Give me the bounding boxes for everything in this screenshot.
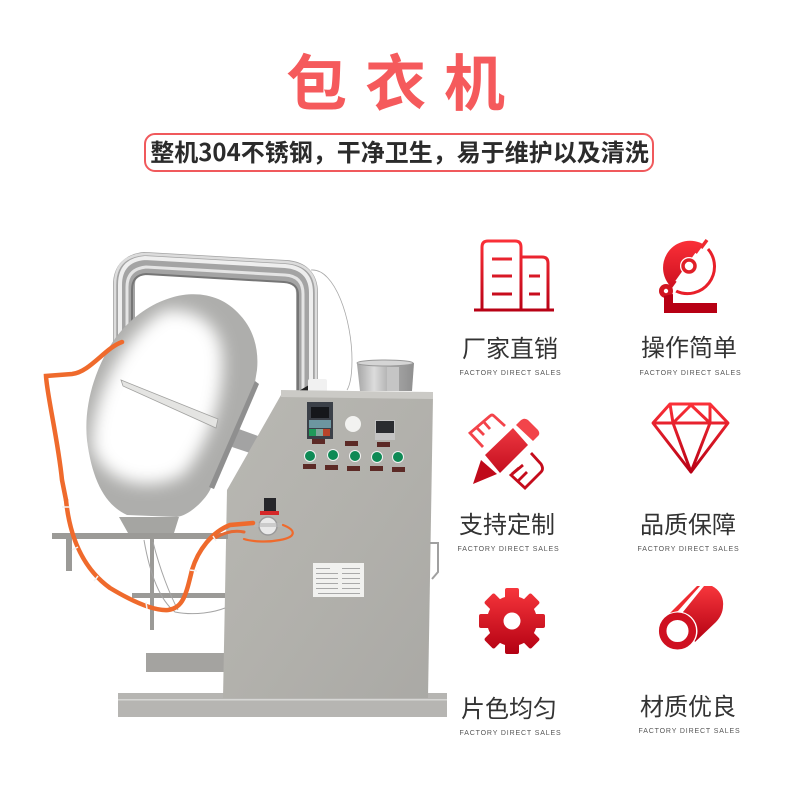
hub between drum and cabinet bbox=[232, 428, 258, 453]
coating drum bbox=[86, 294, 259, 517]
overhead steel pipe bbox=[115, 254, 316, 392]
control panel bbox=[303, 402, 405, 472]
feature: factory direct sales bbox=[459, 241, 562, 377]
feature: easy operation bbox=[639, 240, 742, 377]
thin grey wires bbox=[144, 540, 225, 614]
green buttons bbox=[304, 450, 404, 462]
thin sensor wire bbox=[311, 270, 352, 390]
label: 操作简单 bbox=[641, 335, 737, 362]
subtitle pill: 整机304不锈钢，干净卫生，易于维护以及清洗 bbox=[150, 133, 649, 168]
english caption: FACTORY DIRECT SALES bbox=[639, 370, 742, 377]
small red-brown tags bbox=[303, 439, 405, 472]
orange air hoses bbox=[46, 342, 293, 610]
rear rails bbox=[146, 653, 226, 672]
english caption: FACTORY DIRECT SALES bbox=[457, 546, 560, 553]
label: 支持定制 bbox=[459, 512, 555, 539]
drum glass slot bbox=[121, 380, 218, 428]
label: 材质优良 bbox=[640, 694, 736, 721]
side handle bbox=[430, 543, 438, 579]
icon: gear bbox=[479, 588, 545, 654]
temperature controller bbox=[375, 420, 395, 440]
feature: fine material bbox=[638, 586, 741, 735]
support rods bbox=[52, 533, 228, 630]
machine photo illustration bbox=[46, 254, 447, 717]
feature: quality assurance bbox=[637, 404, 740, 553]
funnel under drum bbox=[119, 517, 179, 533]
cabinet body bbox=[223, 395, 433, 698]
feature: custom support bbox=[457, 415, 560, 553]
frequency inverter bbox=[307, 402, 333, 439]
black cable stub bbox=[297, 385, 309, 392]
english caption: FACTORY DIRECT SALES bbox=[638, 728, 741, 735]
drum flange bbox=[209, 381, 259, 489]
english caption: FACTORY DIRECT SALES bbox=[459, 370, 562, 377]
round white dial bbox=[345, 416, 361, 432]
label: 片色均匀 bbox=[461, 696, 557, 723]
icon: diamond bbox=[653, 404, 728, 472]
icon: buildings bbox=[474, 241, 554, 310]
icon: pencil and ruler bbox=[470, 415, 542, 488]
title: 包衣机 bbox=[286, 34, 523, 123]
feature: even colour bbox=[459, 588, 562, 737]
nameplate bbox=[313, 563, 364, 597]
icon: disc on stand bbox=[659, 240, 717, 313]
label: 厂家直销 bbox=[462, 336, 558, 363]
english caption: FACTORY DIRECT SALES bbox=[459, 730, 562, 737]
air regulator gauge bbox=[254, 498, 282, 535]
icon: steel tube bbox=[658, 586, 723, 650]
label: 品质保障 bbox=[640, 512, 736, 539]
base frame bbox=[118, 693, 447, 717]
feed hopper bbox=[357, 360, 414, 391]
cabinet top plate bbox=[281, 390, 433, 399]
cable ties bbox=[62, 507, 216, 609]
white junction box bbox=[308, 379, 327, 392]
english caption: FACTORY DIRECT SALES bbox=[637, 546, 740, 553]
